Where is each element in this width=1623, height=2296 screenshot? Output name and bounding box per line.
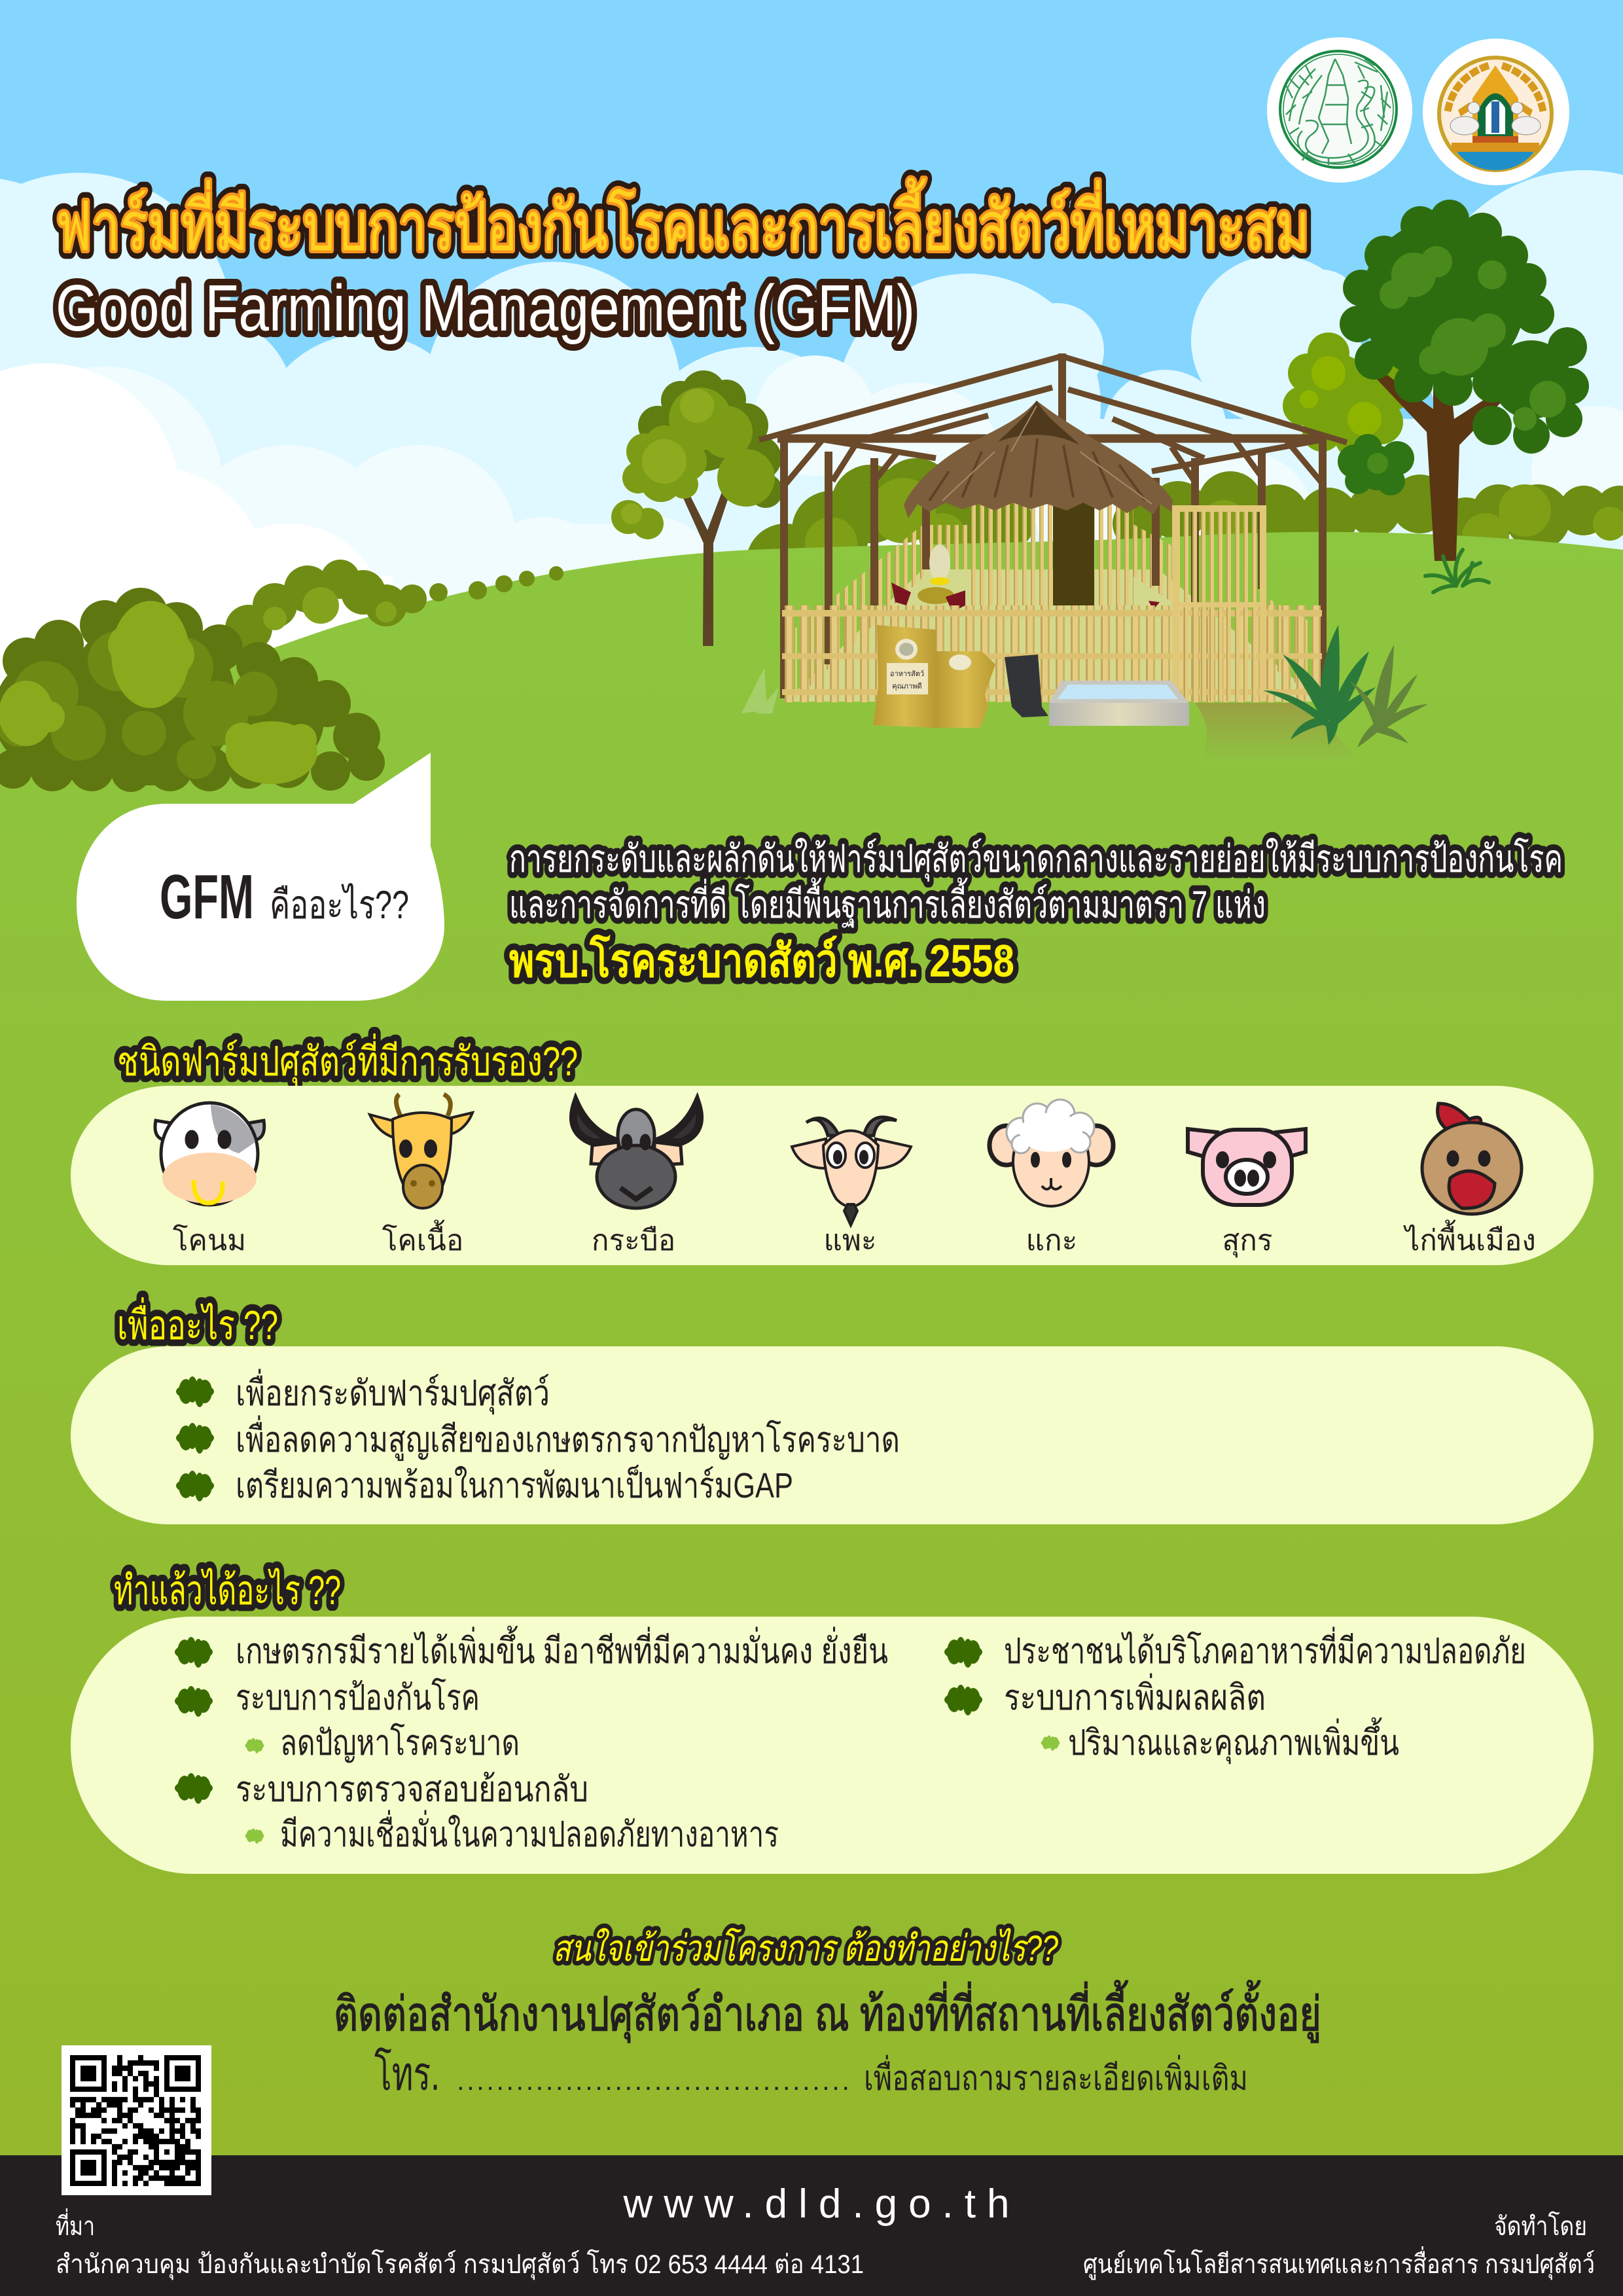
speech bubble [77, 753, 444, 1001]
panel: benefits list [71, 1617, 1594, 1874]
contact line: ติดต่อสำนักงานปศุสัตว์อำเภอ ณ ท้องที่ที่สถานที่เลี้ยงสัตว์ตั้งอยู่ [334, 1980, 1321, 2043]
animal labels: โคเนื้อ [382, 1219, 463, 1257]
phone line [374, 2047, 1248, 2100]
panel: benefits list: ระบบการตรวจสอบย้อนกลับ [236, 1770, 588, 1809]
source credit: ที่มา [56, 2208, 95, 2241]
rolling green hill [0, 532, 1623, 2160]
logo: Ministry of Agriculture seal [1267, 37, 1412, 183]
farm: spiky plants [1263, 625, 1428, 747]
producer credit [1083, 2212, 1595, 2280]
panel: benefits list: มีความเชื่อมั่นในความปลอดภัยทางอาหาร [280, 1810, 779, 1854]
animal labels: แพะ [823, 1225, 877, 1257]
grass plant under tree [1425, 550, 1489, 592]
producer credit: จัดทำโดย [1494, 2212, 1587, 2241]
panel: animal types [71, 1086, 1594, 1265]
farm: hut body [970, 497, 1133, 605]
tree: middle left [611, 370, 783, 646]
phone line: เพื่อสอบถามรายละเอียดเพิ่มเติม [864, 2054, 1248, 2098]
animal labels: ไก่พื้นเมือง [1403, 1219, 1536, 1257]
QR code [62, 2045, 211, 2195]
tree: large right [1283, 200, 1589, 561]
farm: pen floor [785, 569, 1322, 702]
icon: buffalo [573, 1103, 700, 1208]
logo: Department of Livestock Development seal [1423, 39, 1569, 185]
subtitle: Good Farming Management (GFM) [56, 272, 915, 345]
farm: bamboo gate [1172, 505, 1266, 702]
sky background [0, 0, 1623, 851]
speech bubble: GFM [160, 862, 254, 932]
description text [509, 837, 1563, 986]
footer band [0, 2155, 1623, 2296]
clouds: light middle layer [0, 355, 1623, 694]
website: www.dld.go.th [623, 2181, 1021, 2227]
farm: rubber boots [1005, 655, 1048, 717]
heading: farm types: ชนิดฟาร์มปศุสัตว์ที่มีการรับรอง?? [117, 1033, 578, 1086]
panel: benefits list: ปริมาณและคุณภาพเพิ่มขึ้น [1068, 1717, 1399, 1765]
heading: purpose: เพื่ออะไร ?? [117, 1297, 278, 1348]
small bushes on hill crest [225, 560, 563, 652]
source credit: สำนักควบคุม ป้องกันและบำบัดโรคสัตว์ กรมปศุสัตว์ โทร 02 653 4444 ต่อ 4131 [56, 2250, 864, 2280]
farm: chickens, drinkers and feeders [891, 545, 1160, 612]
call to action heading: สนใจเข้าร่วมโครงการ ต้องทำอย่างไร?? [553, 1928, 1058, 1969]
panel: benefits list: ระบบการเพิ่มผลผลิต [1004, 1673, 1266, 1717]
panel: benefits list: ระบบการป้องกันโรค [236, 1677, 480, 1717]
farm: olive footpath [1195, 703, 1364, 766]
animal labels [173, 1219, 1536, 1258]
heading: benefits: ทำแล้วได้อะไร ?? [114, 1568, 341, 1613]
icon: dairy cow [155, 1103, 264, 1205]
farm: feed sacks: อาหารสัตว์ [890, 670, 924, 678]
farm: disinfectant foot bath [1049, 681, 1189, 726]
icon: native chicken [1422, 1103, 1522, 1214]
farm: timber roof frame and posts [759, 353, 1347, 698]
panel: benefits list: ลดปัญหาโรคระบาด [280, 1723, 520, 1763]
icon: beef cattle [370, 1094, 473, 1208]
animal labels: โคนม [173, 1224, 246, 1257]
speech bubble: คืออะไร?? [270, 882, 409, 927]
icon: goat [792, 1117, 911, 1225]
bushes: foreground left [0, 588, 385, 792]
panel: purpose list: เตรียมความพร้อมในการพัฒนาเป็นฟาร์มGAP [236, 1465, 793, 1505]
animal labels: กระบือ [592, 1225, 675, 1257]
animal labels: สุกร [1222, 1225, 1273, 1258]
panel: purpose list: เพื่อยกระดับฟาร์มปศุสัตว์ [236, 1369, 550, 1415]
phone line: ........................................ [457, 2065, 849, 2096]
phone line: โทร. [374, 2047, 440, 2100]
farm: back and side bamboo fences [795, 524, 1322, 700]
farm: front bamboo fence [782, 605, 1322, 702]
farm: thatched roof [904, 401, 1173, 518]
animal labels: แกะ [1026, 1225, 1077, 1257]
description text: และการจัดการที่ดี โดยมีพื้นฐานการเลี้ยงสัตว์ตามมาตรา 7 แห่ง [509, 878, 1266, 927]
farm: feed sacks: คุณภาพดี [892, 682, 922, 691]
panel: purpose list: เพื่อลดความสูญเสียของเกษตรกรจากปัญหาโรคระบาด [236, 1415, 900, 1461]
clouds: white front layer [0, 363, 393, 720]
clouds: pale back layer [0, 170, 1623, 746]
panel: purpose list [71, 1346, 1594, 1524]
source credit [56, 2208, 864, 2280]
farm: grass tuft [741, 668, 779, 713]
icon: sheep [990, 1100, 1113, 1206]
background tree line [746, 458, 1623, 602]
panel: benefits list: เกษตรกรมีรายได้เพิ่มขึ้น มีอาชีพที่มีความมั่นคง ยั่งยืน [236, 1626, 888, 1671]
farm: feed sacks [873, 625, 995, 728]
icon: pig [1188, 1129, 1306, 1205]
description text: พรบ.โรคระบาดสัตว์ พ.ศ. 2558 [509, 934, 1014, 986]
